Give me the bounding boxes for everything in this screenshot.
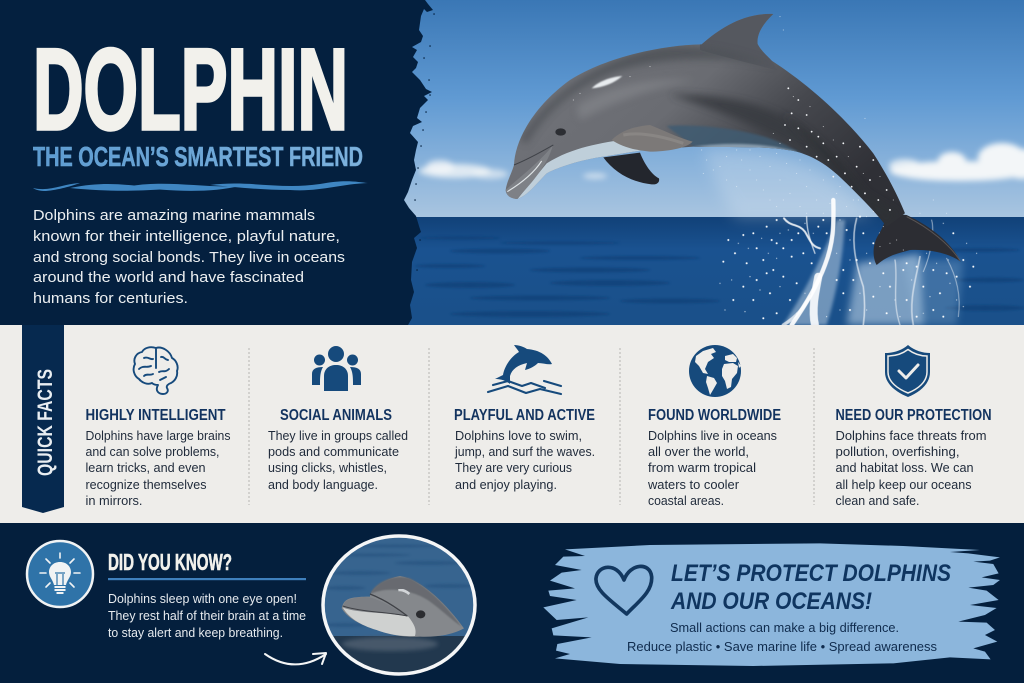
near flipper <box>612 125 693 152</box>
fact 2: social animals <box>268 346 408 492</box>
intro text: around the world and have fascinated <box>33 269 304 286</box>
body text: and habitat loss. We can <box>836 461 974 475</box>
fact 1: highly intelligent <box>86 347 230 508</box>
heading: PLAYFUL AND ACTIVE <box>454 407 595 424</box>
ribbon: quick facts: QUICK FACTS <box>34 369 57 476</box>
body text: Dolphins face threats from <box>836 429 986 443</box>
eye <box>555 128 566 136</box>
photo: dolphin head in water <box>320 530 480 680</box>
did you know text: They rest half of their brain at a time <box>108 609 306 623</box>
heading: HIGHLY INTELLIGENT <box>86 407 226 424</box>
call to action heading: LET’S PROTECT DOLPHINS <box>671 560 951 587</box>
icon: globe <box>689 345 741 397</box>
call to action text: Small actions can make a big difference. <box>670 620 899 635</box>
fact 4: found worldwide <box>647 345 781 508</box>
subtitle: THE OCEAN’S SMARTEST FRIEND <box>33 141 363 172</box>
body text: jump, and surf the waves. <box>454 445 595 459</box>
fact 3: playful and active <box>454 345 595 492</box>
body text <box>454 429 595 492</box>
spray droplets over sea <box>723 217 973 318</box>
body text: all help keep our oceans <box>836 478 972 492</box>
tail flukes <box>874 213 961 265</box>
panel: call to action brush stroke: Reduce plastic • Save marine life • Spread awareness <box>627 639 937 654</box>
intro text: Dolphins are amazing marine mammals <box>33 207 315 224</box>
body text <box>86 429 230 508</box>
sea wave shading <box>415 236 1024 317</box>
body text: waters to cooler <box>647 478 739 492</box>
body text: and enjoy playing. <box>455 478 557 492</box>
fact 5: need our protection <box>836 345 992 508</box>
icon: leaping dolphin and waves <box>488 345 561 394</box>
heading: FOUND WORLDWIDE <box>648 407 781 424</box>
body text: pollution, overfishing, <box>836 445 960 459</box>
icon: people <box>312 346 361 391</box>
body text <box>268 429 408 492</box>
intro text <box>33 207 345 307</box>
panel: footer background <box>0 523 1024 683</box>
heading: did you know: DID YOU KNOW? <box>108 549 232 575</box>
body text: They live in groups called <box>268 429 408 443</box>
decorative wave underline <box>33 181 368 191</box>
water droplets on body <box>785 88 890 210</box>
intro text: and strong social bonds. They live in oceans <box>33 249 345 266</box>
did you know text: to stay alert and keep breathing. <box>108 626 283 640</box>
mist and splash <box>702 17 977 325</box>
body text: all over the world, <box>648 445 749 459</box>
body shading <box>517 14 900 230</box>
heading: SOCIAL ANIMALS <box>280 407 392 424</box>
icon: light bulb <box>27 541 93 607</box>
body text: and body language. <box>268 478 378 492</box>
body text: Dolphins live in oceans <box>648 429 777 443</box>
arrow <box>265 653 326 664</box>
panel: title background with torn edge <box>0 0 434 325</box>
body text: in mirrors. <box>86 494 142 508</box>
body text <box>836 429 986 508</box>
body text: using clicks, whistles, <box>268 461 387 475</box>
body text: clean and safe. <box>836 494 920 508</box>
body text: Dolphins love to swim, <box>455 429 582 443</box>
panel: call to action brush stroke <box>543 543 1000 666</box>
icon: shield with check <box>885 345 930 397</box>
did you know text: Dolphins sleep with one eye open! <box>108 592 297 606</box>
clouds <box>419 143 1024 181</box>
far flipper <box>603 153 659 184</box>
body text: coastal areas. <box>648 494 724 508</box>
did you know text <box>108 592 306 640</box>
title: DOLPHIN <box>33 26 348 154</box>
spray droplets in the air <box>702 17 947 217</box>
panel: call to action brush stroke: AND OUR OCEANS! <box>670 588 872 615</box>
heading: NEED OUR PROTECTION <box>836 407 992 424</box>
body text: from warm tropical <box>648 461 756 475</box>
body text: pods and communicate <box>268 445 399 459</box>
body text: learn tricks, and even <box>86 461 206 475</box>
body text: recognize themselves <box>86 478 206 492</box>
body text: Dolphins have large brains <box>86 429 230 443</box>
dolphin <box>506 14 961 265</box>
photo: jumping dolphin over the ocean <box>400 0 1024 325</box>
intro text: known for their intelligence, playful nature, <box>33 228 340 245</box>
body <box>506 14 905 227</box>
panel: quick facts band <box>0 325 1024 523</box>
body text: They are very curious <box>455 461 572 475</box>
intro text: humans for centuries. <box>33 290 188 307</box>
body text: and can solve problems, <box>86 445 220 459</box>
ribbon: quick facts <box>22 325 64 513</box>
icon: brain <box>134 347 178 394</box>
icon: heart <box>596 566 652 614</box>
sky <box>400 0 1024 218</box>
sea <box>400 217 1024 325</box>
body text <box>647 429 777 508</box>
jaw and mouth <box>506 146 553 199</box>
